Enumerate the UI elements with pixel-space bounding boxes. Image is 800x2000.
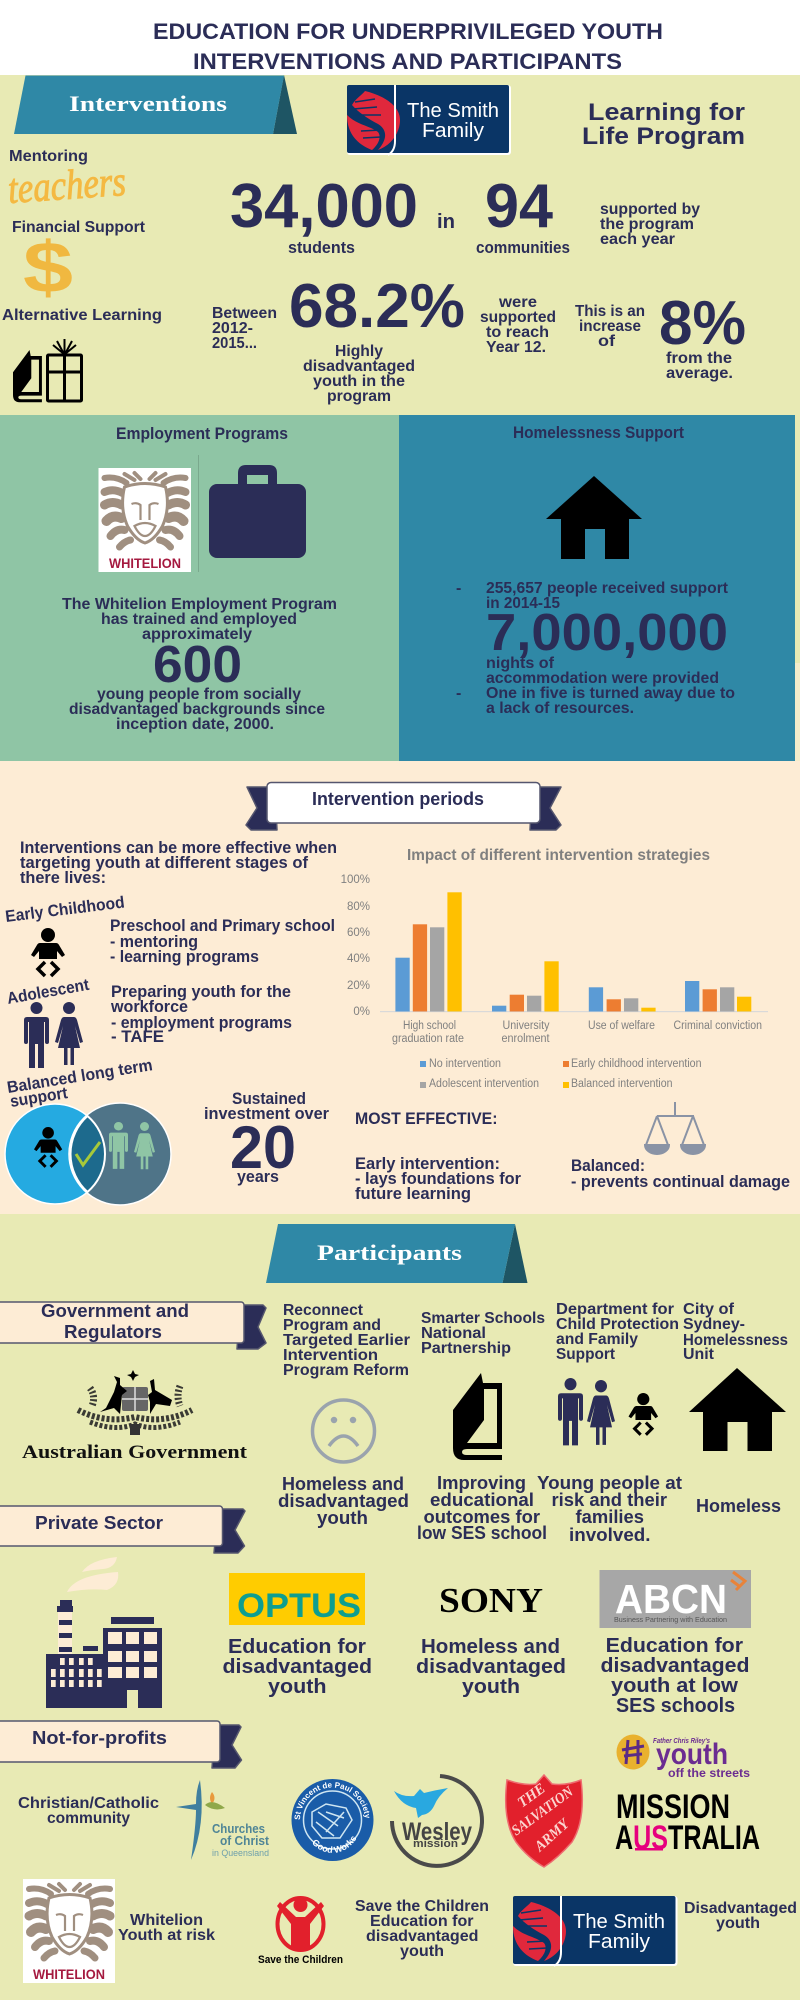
logo: Youth off the Streets: Father Chris Riley's — [653, 1738, 710, 1745]
text: reconnect program: Program Reform — [283, 1362, 409, 1379]
heading banner: Intervention periods — [246, 782, 561, 830]
text: were supported to reach Year 12: supported — [480, 309, 556, 326]
stat: sustained investment 20 years — [204, 1090, 330, 1186]
text: improving educational outcomes — [417, 1473, 547, 1543]
icon: book — [453, 1373, 502, 1460]
stat: sustained investment 20 years: Sustained — [232, 1090, 306, 1108]
icon: scales — [645, 1102, 705, 1154]
text: this is an increase of: of — [598, 333, 616, 350]
stat: 8%: average. — [666, 365, 733, 382]
logo: St Vincent de Paul Society — [292, 1779, 374, 1861]
text: department for child protection: Support — [556, 1346, 616, 1363]
logo: Sony: SONY — [439, 1581, 543, 1620]
text: Disadvantaged youth — [684, 1900, 797, 1932]
text: department for child protection — [556, 1301, 679, 1363]
text: optus education: disadvantaged — [222, 1656, 372, 1678]
logo: Churches of Christ: Churches — [212, 1821, 265, 1836]
logo: ABCN: ABCN — [615, 1576, 727, 1622]
text: balanced — [571, 1157, 790, 1191]
heading ribbon: Interventions: Interventions — [69, 91, 228, 116]
stat: 8%: 8% — [659, 289, 746, 358]
text: Whitelion youth at risk — [118, 1912, 215, 1944]
text: homelessness facts: - — [456, 580, 461, 597]
logo: Salvation Army: SALVATION — [509, 1783, 577, 1839]
text: Disadvantaged youth: Disadvantaged — [684, 1900, 797, 1917]
bars: use of welfare — [589, 987, 656, 1012]
text: reconnect program: Program and — [283, 1317, 381, 1334]
logo: The Smith Family: The Smith — [407, 100, 499, 122]
y axis labels: 100% — [341, 874, 370, 886]
text: optus education: Education for — [228, 1636, 366, 1658]
text: whitelion employment program: approximately — [142, 626, 252, 643]
text: smarter schools — [421, 1310, 545, 1357]
logo: Whitelion: WHITELION — [33, 1966, 105, 1982]
text: Whitelion youth at risk: Whitelion — [130, 1912, 203, 1929]
logo: Salvation Army: THE — [515, 1781, 549, 1811]
intervention: alternative learning — [2, 307, 162, 402]
logo: Australian Government — [22, 1370, 248, 1463]
text: between 2012-2015: 2012- — [212, 320, 253, 337]
heading banner: Intervention periods: Intervention periods — [312, 789, 484, 809]
intervention: financial support: Financial Support — [12, 219, 146, 236]
stat: 94 communities: communities — [476, 239, 570, 257]
icon: baby — [31, 928, 65, 976]
text: homeless: Homeless — [696, 1496, 781, 1516]
y axis labels: 0% — [353, 1006, 370, 1018]
text: were supported to reach Year 12: were — [498, 294, 537, 311]
text: adolescent programs: - TAFE — [111, 1028, 164, 1046]
banner: Private Sector: Private Sector — [35, 1513, 163, 1533]
heading ribbon: Participants: Participants — [317, 1240, 463, 1265]
logo: The Smith Family: The Smith — [573, 1911, 665, 1933]
text: smarter schools: National — [421, 1325, 486, 1342]
label: Adolescent: Adolescent — [6, 976, 91, 1008]
panel: employment programs — [0, 415, 399, 761]
text: city of sydney: Sydney- — [683, 1316, 745, 1333]
legend: Early childhood intervention — [571, 1058, 702, 1070]
panel: homelessness support — [399, 415, 800, 761]
bars: high school graduation rate — [395, 892, 462, 1012]
text: young people at risk: risk and their — [552, 1490, 667, 1510]
banner: Government and Regulators: Government and — [41, 1301, 189, 1321]
logo: Youth off the Streets: youth — [656, 1738, 728, 1771]
logo: Whitelion — [98, 468, 191, 572]
text: homeless and disadvantaged youth: youth — [317, 1508, 368, 1528]
text: homelessness facts: 7,000,000 — [486, 604, 728, 662]
stat: 94 communities: 94 — [485, 172, 554, 241]
logo: Mission Australia — [615, 1788, 760, 1857]
stat: 8%: from the — [666, 350, 732, 367]
text: young people at risk: Young people at — [537, 1473, 682, 1493]
text: in: in — [437, 211, 455, 233]
stat: 34,000 students: 34,000 — [230, 172, 418, 241]
text: early intervention: Early intervention: — [355, 1155, 500, 1173]
panel: intervention periods — [0, 761, 800, 1214]
banner: Not-for-profits: Not-for-profits — [32, 1728, 167, 1748]
text: Whitelion youth at risk: Youth at risk — [118, 1927, 215, 1944]
intervention: mentoring: Mentoring — [9, 148, 88, 165]
text: whitelion employment program: inception date, 2000. — [116, 716, 274, 733]
text: sony homeless: disadvantaged — [416, 1656, 566, 1678]
text: supported by the program — [600, 201, 700, 248]
text: supported by the program: supported by — [600, 201, 700, 218]
text: improving educational outcomes: outcomes for — [424, 1507, 540, 1527]
stat: 68.2%: youth in the — [313, 373, 405, 390]
text: sony homeless — [416, 1636, 566, 1698]
text: improving educational outcomes: educational — [430, 1490, 534, 1510]
banner: Not-for-profits — [0, 1721, 242, 1768]
text: homelessness facts: - — [456, 685, 461, 702]
text: intro: Interventions can be more effective when — [20, 839, 337, 857]
text: Christian/Catholic community — [18, 1795, 159, 1827]
logo: Salvation Army — [506, 1775, 582, 1867]
legend — [420, 1058, 702, 1090]
text: between 2012-2015 — [212, 305, 277, 352]
text: department for child protection: and Family — [556, 1331, 638, 1348]
category labels: enrolment — [502, 1033, 550, 1045]
text: were supported to reach Year 12 — [480, 294, 556, 356]
icon: house — [546, 476, 642, 559]
logo: Mission Australia: AUSTRALIA — [615, 1819, 760, 1857]
intervention: mentoring: teachers — [6, 159, 127, 213]
text: adolescent programs: workforce — [110, 998, 188, 1016]
icon: gift window — [48, 339, 82, 401]
text: adolescent programs: Preparing youth for the — [111, 983, 291, 1001]
text: homeless and disadvantaged youth: Homeless and — [282, 1474, 404, 1494]
stat: 68.2%: program — [327, 388, 391, 405]
logo: Whitelion: WHITELION — [109, 555, 181, 571]
y axis labels: 80% — [347, 901, 370, 913]
y axis labels: 60% — [347, 927, 370, 939]
text: balanced: Balanced: — [571, 1157, 645, 1175]
text: abcn education: Education for — [606, 1635, 743, 1657]
intervention: financial support — [12, 219, 146, 308]
icon: man and woman — [24, 1002, 83, 1068]
intervention: alternative learning: Alternative Learning — [2, 307, 162, 324]
category labels: graduation rate — [392, 1033, 464, 1045]
stat: 68.2%: 68.2% — [289, 272, 465, 341]
text: homeless and disadvantaged youth: disadvantaged — [278, 1491, 409, 1511]
text: department for child protection: Child Protection — [556, 1316, 679, 1333]
legend: Adolescent intervention — [429, 1078, 539, 1090]
icon: house — [689, 1368, 786, 1451]
text: abcn education — [600, 1635, 750, 1717]
icon: sad face — [312, 1400, 374, 1462]
stat: sustained investment 20 years: investment over — [204, 1105, 330, 1123]
legend: Balanced intervention — [571, 1078, 672, 1090]
text: Save the Children education: youth — [400, 1943, 444, 1960]
text: early intervention: future learning — [355, 1185, 471, 1203]
text: improving educational outcomes: low SES school — [417, 1523, 547, 1543]
banner: Government and Regulators — [0, 1301, 266, 1349]
text: city of sydney: City of — [683, 1301, 735, 1318]
text: reconnect program: Targeted Earlier — [283, 1332, 410, 1349]
stat: 34,000 students: students — [288, 239, 355, 257]
text: young people at risk — [537, 1473, 682, 1545]
label: Balanced long term support: Balanced long term — [6, 1056, 154, 1097]
text: improving educational outcomes: Improving — [437, 1473, 526, 1493]
category labels — [392, 1020, 762, 1045]
text: city of sydney: Unit — [683, 1346, 715, 1363]
text: Save the Children education: disadvantaged — [366, 1928, 478, 1945]
category labels: Use of welfare — [588, 1020, 655, 1032]
logo: The Smith Family: Family — [588, 1931, 650, 1953]
panel: participants — [0, 1224, 797, 1983]
bar chart: impact of different intervention strategies — [341, 847, 768, 1090]
bars: criminal conviction — [685, 981, 751, 1012]
logo: ABCN — [600, 1570, 751, 1628]
logo: Optus — [229, 1573, 365, 1625]
text: young people at risk: involved. — [569, 1525, 650, 1545]
heading: Learning for Life Program: Life Program — [582, 123, 745, 150]
text: intro — [20, 839, 337, 887]
text: homelessness facts: One in five is turned away due to — [486, 685, 735, 702]
text: abcn education: youth at low — [611, 1675, 738, 1697]
title: INTERVENTIONS AND PARTICIPANTS — [193, 49, 622, 74]
text: this is an increase of: This is an — [575, 303, 645, 320]
text: Christian/Catholic community: community — [47, 1810, 130, 1827]
text: homelessness facts: 255,657 people received support — [486, 580, 729, 597]
text: homeless and disadvantaged youth — [278, 1474, 409, 1528]
text: between 2012-2015: Between — [212, 305, 277, 322]
text: Save the Children education: Education for — [370, 1913, 474, 1930]
logo: Save the Children: Save the Children — [258, 1954, 343, 1966]
text: early childhood programs: Preschool and Primary school — [110, 917, 335, 935]
text: homelessness facts: nights of — [486, 655, 555, 672]
text: supported by the program: each year — [600, 231, 675, 248]
text: whitelion employment program — [62, 596, 337, 733]
logo: Salvation Army: ARMY — [531, 1815, 574, 1856]
intervention: financial support: $ — [23, 228, 73, 308]
text: Christian/Catholic community: Christian/Catholic — [18, 1795, 159, 1812]
label: Balanced long term support: support — [9, 1084, 69, 1111]
text: whitelion employment program: The Whitelion Employment Program — [62, 596, 337, 613]
logo: St Vincent de Paul Society: Good Works — [312, 1836, 356, 1853]
logo: The Smith Family: Family — [422, 120, 484, 142]
text: sony homeless: Homeless and — [421, 1636, 560, 1658]
panel: homelessness support: Homelessness Support — [513, 424, 684, 442]
text: whitelion employment program: disadvantaged backgrounds since — [69, 701, 325, 718]
icon: family — [558, 1378, 658, 1445]
text: homelessness facts — [456, 580, 735, 717]
text: homelessness facts: in 2014-15 — [486, 595, 560, 612]
text: homelessness facts: a lack of resources. — [486, 700, 634, 717]
logo: Optus: OPTUS — [237, 1587, 361, 1625]
text: supported by the program: the program — [600, 216, 694, 233]
text: sony homeless: youth — [462, 1676, 520, 1698]
panel: employment programs: Employment Programs — [116, 425, 288, 443]
label: Early Childhood: Early Childhood — [4, 893, 126, 926]
text: abcn education: SES schools — [616, 1695, 735, 1717]
banner: Private Sector — [0, 1506, 245, 1553]
logo: Churches of Christ — [176, 1780, 270, 1860]
logo: Australian Government: Australian Government — [22, 1442, 248, 1463]
logo: The Smith Family — [513, 1896, 678, 1966]
icon: briefcase — [209, 465, 306, 558]
logo: Churches of Christ: in Queensland — [212, 1848, 269, 1858]
category labels: University — [502, 1020, 550, 1032]
text: were supported to reach Year 12: to reach — [486, 324, 549, 341]
bar chart: impact of different intervention strategies: Impact of different intervention strategies — [407, 847, 710, 864]
text: between 2012-2015: 2015... — [212, 335, 257, 352]
icon: factory — [46, 1557, 162, 1708]
text: abcn education: disadvantaged — [600, 1655, 750, 1677]
heading ribbon: Interventions — [14, 75, 297, 134]
text: this is an increase of: increase — [579, 318, 641, 335]
text: adolescent programs: - employment programs — [111, 1014, 292, 1032]
heading ribbon: Participants — [266, 1224, 528, 1283]
text: optus education — [222, 1636, 372, 1698]
logo: Wesley Mission: mission — [413, 1838, 458, 1850]
logo: The Smith Family — [347, 85, 511, 155]
text: whitelion employment program: young people from socially — [97, 686, 301, 703]
stat: 68.2% — [289, 272, 465, 405]
text: optus education: youth — [268, 1676, 326, 1698]
text: early intervention — [355, 1155, 522, 1203]
bars: university enrolment — [492, 961, 559, 1012]
text: this is an increase of — [575, 303, 645, 350]
logo: St Vincent de Paul Society: St Vincent de Paul Society — [294, 1782, 370, 1820]
panel: interventions overview — [0, 75, 800, 415]
logo: Churches of Christ: of Christ — [220, 1833, 270, 1848]
title — [0, 0, 800, 75]
text: city of sydney: Homelessness — [683, 1332, 788, 1349]
icon: venn diagram — [5, 1103, 171, 1205]
text: intro: there lives: — [20, 869, 106, 887]
text: reconnect program — [283, 1302, 410, 1379]
text: young people at risk: families — [576, 1507, 644, 1527]
text: homelessness facts: accommodation were provided — [486, 670, 719, 687]
logo: Youth off the Streets: off the streets — [668, 1766, 750, 1780]
stat: 94 communities — [476, 172, 570, 257]
logo: ABCN: Business Partnering with Education — [614, 1615, 727, 1624]
stat: sustained investment 20 years: 20 — [230, 1114, 296, 1181]
text: Disadvantaged youth: youth — [716, 1915, 760, 1932]
text: smarter schools: Partnership — [421, 1340, 511, 1357]
heading: Learning for Life Program — [582, 99, 745, 150]
text: early intervention: - lays foundations for — [355, 1170, 522, 1188]
y axis labels: 20% — [347, 980, 370, 992]
text: Save the Children education — [355, 1898, 489, 1960]
text: balanced: - prevents continual damage — [571, 1173, 790, 1191]
logo: Wesley Mission: Wesley — [402, 1818, 472, 1846]
heading: most effective: MOST EFFECTIVE: — [355, 1110, 498, 1128]
heading: Learning for Life Program: Learning for — [588, 99, 745, 126]
logo: Save the Children — [258, 1898, 343, 1966]
text: early childhood programs — [110, 917, 335, 966]
text: whitelion employment program: 600 — [153, 636, 242, 694]
text: city of sydney — [683, 1301, 788, 1363]
banner: Government and Regulators: Regulators — [64, 1322, 162, 1342]
y axis labels: 40% — [347, 953, 370, 965]
stat: 68.2%: disadvantaged — [303, 358, 415, 375]
category labels: High school — [403, 1020, 456, 1032]
logo: Wesley Mission — [392, 1776, 482, 1866]
text: adolescent programs — [110, 983, 292, 1046]
text: Save the Children education: Save the Children — [355, 1898, 489, 1915]
category labels: Criminal conviction — [674, 1020, 762, 1032]
text: early childhood programs: - learning programs — [110, 948, 259, 966]
logo: Youth off the Streets — [616, 1734, 750, 1780]
logo: Mission Australia: MISSION — [616, 1788, 730, 1826]
icon: book — [13, 350, 42, 402]
text: smarter schools: Smarter Schools — [421, 1310, 545, 1327]
logo: Whitelion — [23, 1879, 115, 1983]
text: whitelion employment program: has trained and employed — [101, 611, 297, 628]
legend: No intervention — [429, 1058, 501, 1070]
text: reconnect program: Intervention — [283, 1347, 378, 1364]
text: reconnect program: Reconnect — [283, 1302, 364, 1319]
text: early childhood programs: - mentoring — [110, 933, 198, 951]
text: were supported to reach Year 12: Year 12. — [486, 339, 546, 356]
y axis labels — [341, 874, 370, 1018]
stat: 68.2%: Highly — [335, 343, 383, 360]
title: EDUCATION FOR UNDERPRIVILEGED YOUTH — [153, 19, 663, 44]
text: intro: targeting youth at different stages of — [20, 854, 309, 872]
stat: sustained investment 20 years: years — [237, 1168, 279, 1186]
text: department for child protection: Department for — [556, 1301, 674, 1318]
